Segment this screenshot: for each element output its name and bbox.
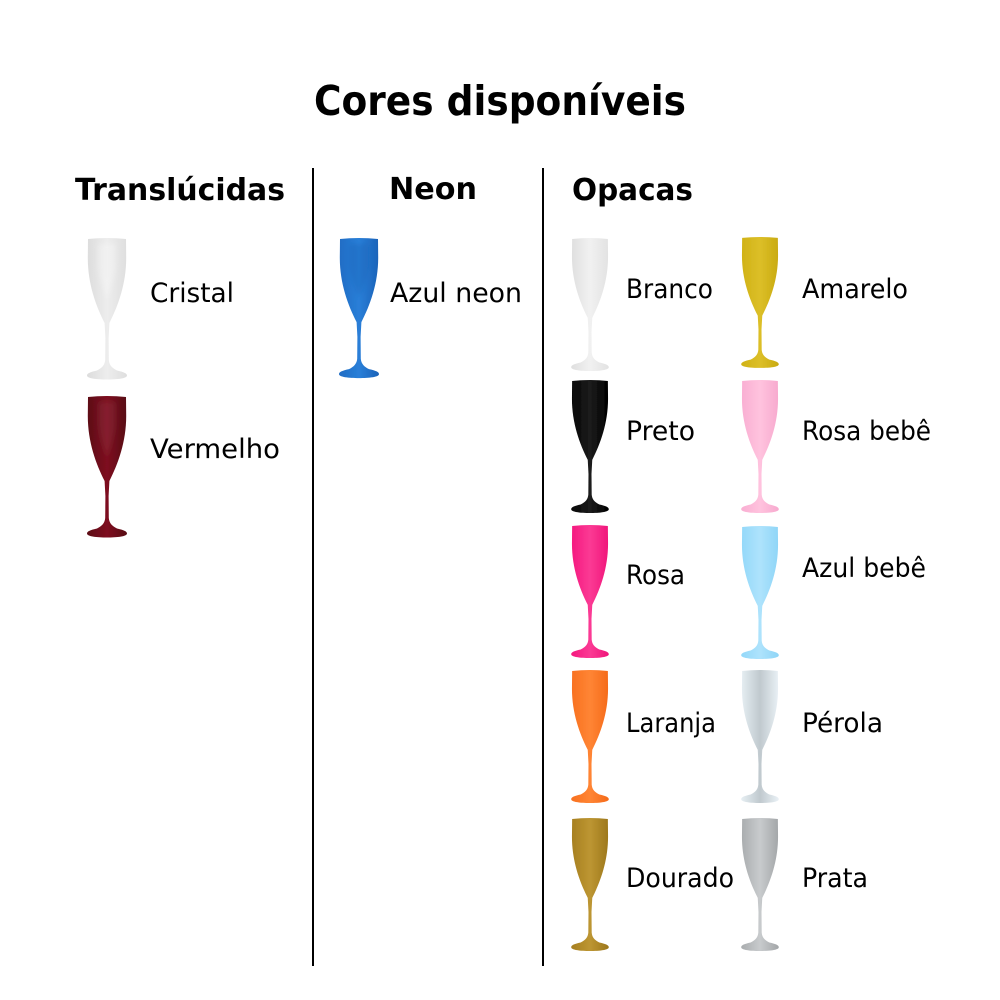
label: Cristal: Cristal: [150, 278, 234, 309]
icon: cristal glass: [87, 238, 127, 380]
label: Azul neon: Azul neon: [390, 278, 522, 309]
divider: left: [312, 168, 314, 966]
item: Azul bebê: [741, 526, 926, 659]
item: Prata: [741, 818, 868, 951]
label: Branco: Branco: [626, 274, 713, 305]
item: Preto: [571, 380, 695, 513]
label: Laranja: Laranja: [626, 708, 716, 739]
label: Dourado: Dourado: [626, 863, 734, 894]
icon: silver glass: [741, 818, 779, 951]
icon: baby blue glass: [741, 526, 779, 659]
item: Vermelho: [87, 396, 280, 538]
item: Amarelo: [741, 237, 908, 368]
icon: pearl glass: [741, 670, 779, 803]
icon: white glass: [571, 238, 609, 371]
icon: black glass: [571, 380, 609, 513]
panel: Neon: [339, 172, 522, 378]
label: Azul bebê: Azul bebê: [802, 553, 926, 584]
heading: Translúcidas: Translúcidas: [75, 173, 285, 208]
item: Rosa bebê: [741, 380, 931, 513]
icon: blue neon glass: [339, 238, 379, 378]
heading: Neon: Neon: [389, 172, 477, 207]
label: Vermelho: Vermelho: [150, 434, 280, 465]
icon: orange glass: [571, 670, 609, 803]
label: Prata: Prata: [802, 863, 868, 894]
label: Pérola: Pérola: [802, 708, 883, 739]
heading: Opacas: Opacas: [572, 173, 693, 208]
icon: gold glass: [571, 818, 609, 951]
label: Amarelo: Amarelo: [802, 274, 908, 305]
icon: baby pink glass: [741, 380, 779, 513]
panel: Opacas: [571, 173, 931, 951]
item: Dourado: [571, 818, 734, 951]
label: Rosa bebê: Rosa bebê: [802, 416, 931, 447]
label: Rosa: Rosa: [626, 560, 685, 591]
item: Pérola: [741, 670, 883, 803]
icon: yellow glass: [741, 237, 779, 368]
label: Preto: Preto: [626, 416, 695, 447]
icon: red glass: [87, 396, 127, 538]
icon: pink glass: [571, 525, 609, 658]
item: Cristal: [87, 238, 234, 380]
item: Branco: [571, 238, 713, 371]
divider: right: [542, 168, 544, 966]
item: Azul neon: [339, 238, 522, 378]
item: Laranja: [571, 670, 716, 803]
item: Rosa: [571, 525, 685, 658]
panel: Translúcidas: [75, 173, 285, 538]
title: Cores disponíveis: [314, 77, 686, 125]
